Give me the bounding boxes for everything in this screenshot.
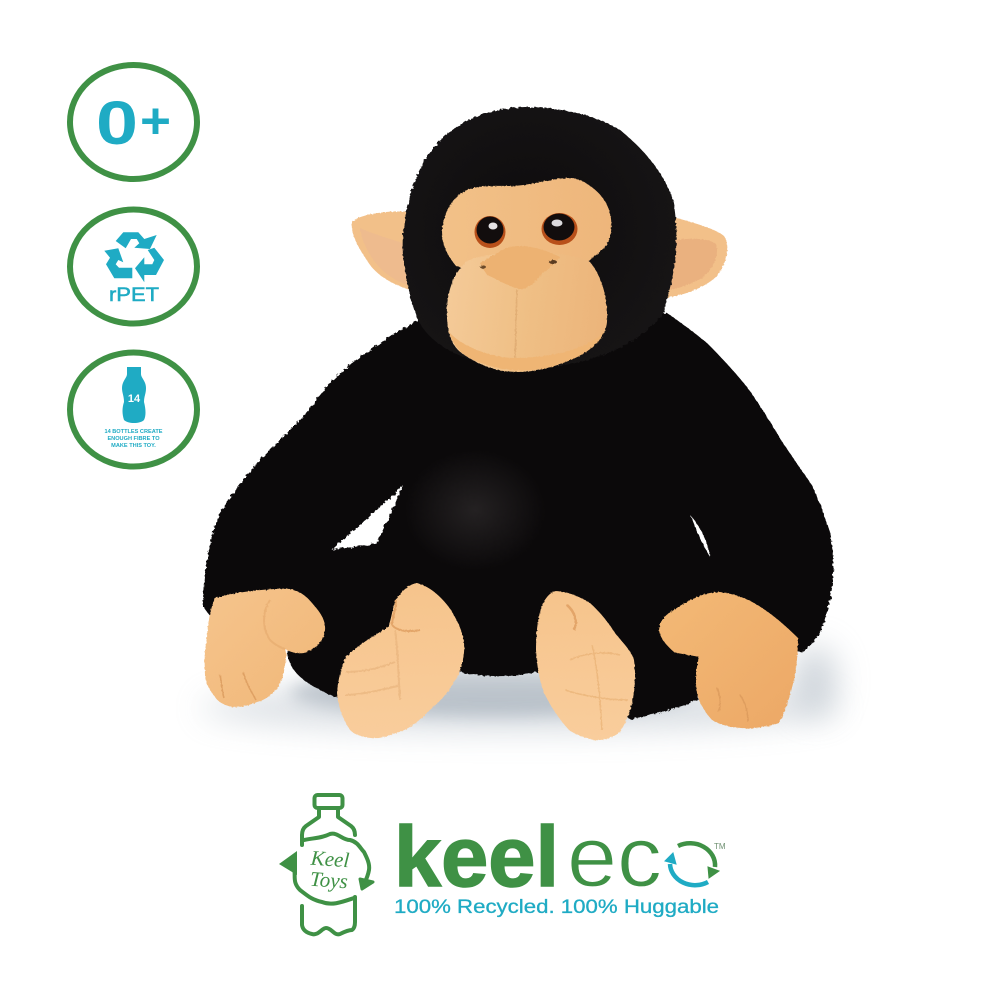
badge: age 0+: + [140, 93, 171, 149]
tagline: 100% Recycled. 100% Huggable [394, 896, 719, 918]
right foot [536, 591, 635, 740]
face [442, 178, 611, 372]
left hand [205, 589, 325, 707]
left foot [337, 583, 464, 738]
bottle caption: 14 BOTTLES CREATE [104, 429, 163, 435]
right ear [665, 216, 727, 298]
badge: 14 bottles: 14 [128, 393, 141, 405]
bottle brand text [309, 846, 350, 893]
muzzle [447, 252, 607, 372]
nose [480, 246, 560, 289]
icon: recycled bottle [279, 795, 373, 934]
logo: keeleco [279, 795, 726, 934]
right hand [659, 592, 798, 728]
right eye [542, 213, 578, 245]
bottle caption: MAKE THIS TOY. [111, 443, 156, 449]
wordmark [394, 810, 662, 905]
bottle brand text: Keel [309, 846, 350, 872]
furry head [403, 107, 676, 368]
floor shadow [200, 646, 840, 730]
badge: age 0+: 0 [96, 89, 138, 157]
left ear [352, 212, 410, 290]
icon: recycling arrows [104, 232, 164, 282]
bottle caption: ENOUGH FIBRE TO [107, 436, 160, 442]
bottle brand text: Toys [309, 867, 349, 893]
wordmark: keel [394, 810, 559, 905]
trademark: TM [714, 842, 726, 851]
icon: circular arrows forming the letter o [665, 843, 719, 885]
plush chimpanzee [203, 107, 833, 740]
badge: recycled rPET [70, 210, 197, 324]
icon: blue bottle [122, 367, 146, 423]
left eye [474, 216, 506, 248]
wordmark: ec [567, 810, 662, 905]
badge: 14 bottles [70, 352, 197, 466]
badge: recycled rPET: rPET [109, 285, 159, 306]
badge: age 0+ [70, 65, 197, 179]
furry body and arms [203, 313, 833, 720]
